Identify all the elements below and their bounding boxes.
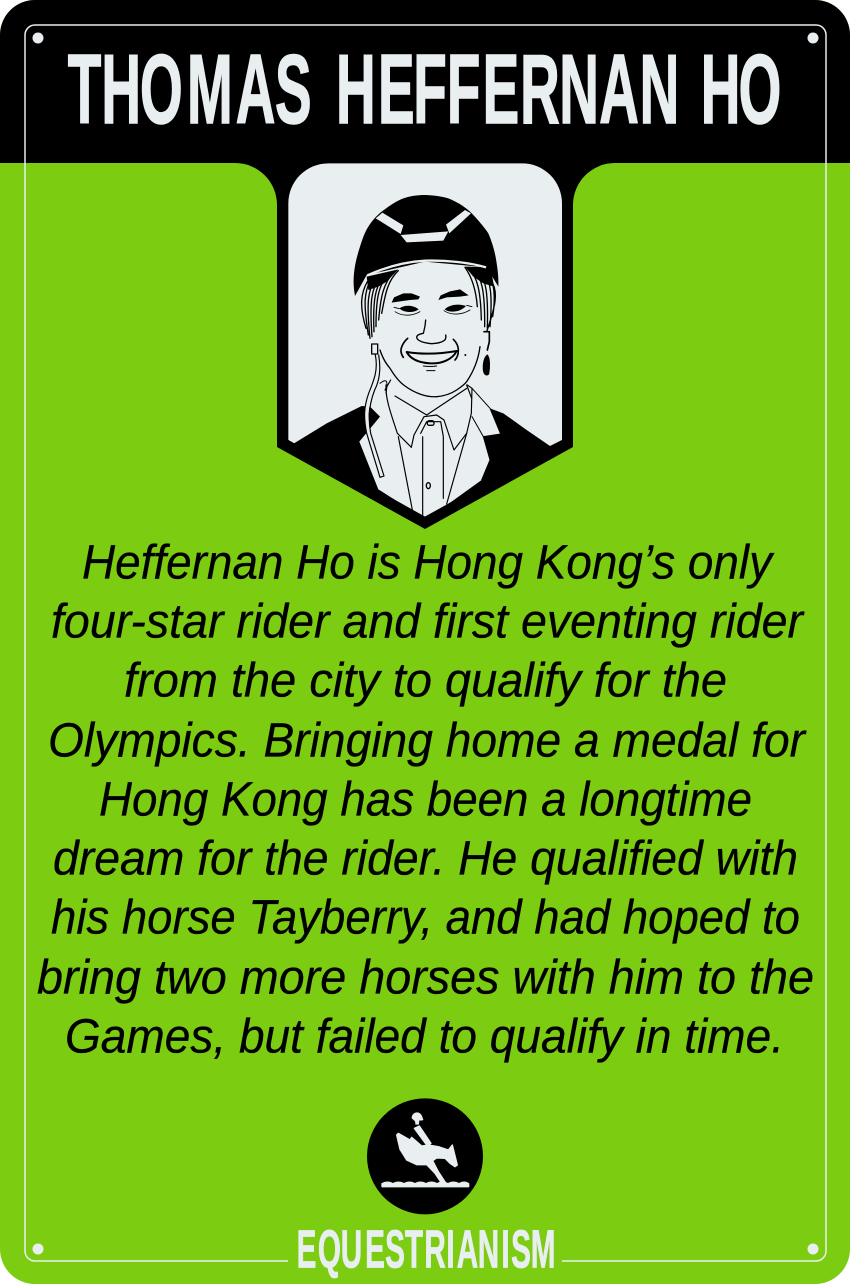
- eyes: [399, 306, 419, 312]
- biography text: Heffernan Ho is Hong Kong’s only: [82, 536, 775, 590]
- biography text: four-star rider and first eventing rider: [51, 596, 805, 648]
- water: [382, 1182, 469, 1187]
- jacket: [288, 406, 562, 523]
- face lines: [380, 305, 480, 398]
- shirt collar and placket: [386, 385, 501, 516]
- mouth: [407, 351, 457, 363]
- biography text: Games, but failed to qualify in time.: [65, 1010, 784, 1064]
- helmet brim: [367, 261, 486, 275]
- eyebrows: [392, 293, 420, 303]
- biography text: his horse Tayberry, and had hoped to: [51, 892, 800, 944]
- category label: EQUESTRIANISM: [297, 1221, 555, 1280]
- rider: [412, 1113, 431, 1146]
- icon: equestrian sport badge: [367, 1098, 483, 1214]
- portrait illustration: [288, 163, 562, 523]
- biography text: [37, 536, 814, 1064]
- chin strap and buckle: [365, 332, 490, 477]
- helmet: [354, 195, 498, 296]
- biography text: Hong Kong has been a longtime: [99, 774, 752, 826]
- biography text: dream for the rider. He qualified with: [53, 832, 798, 886]
- biography text: bring two more horses with him to the: [37, 952, 814, 1004]
- title: THOMAS HEFFERNAN HO: [68, 34, 781, 144]
- biography text: from the city to qualify for the: [124, 654, 727, 708]
- biography text: Olympics. Bringing home a medal for: [48, 714, 807, 768]
- helmet trim: [376, 210, 471, 242]
- horse: [397, 1133, 457, 1183]
- hair: [362, 267, 495, 338]
- header band with portrait shield: [0, 0, 850, 529]
- portrait background: [288, 163, 562, 517]
